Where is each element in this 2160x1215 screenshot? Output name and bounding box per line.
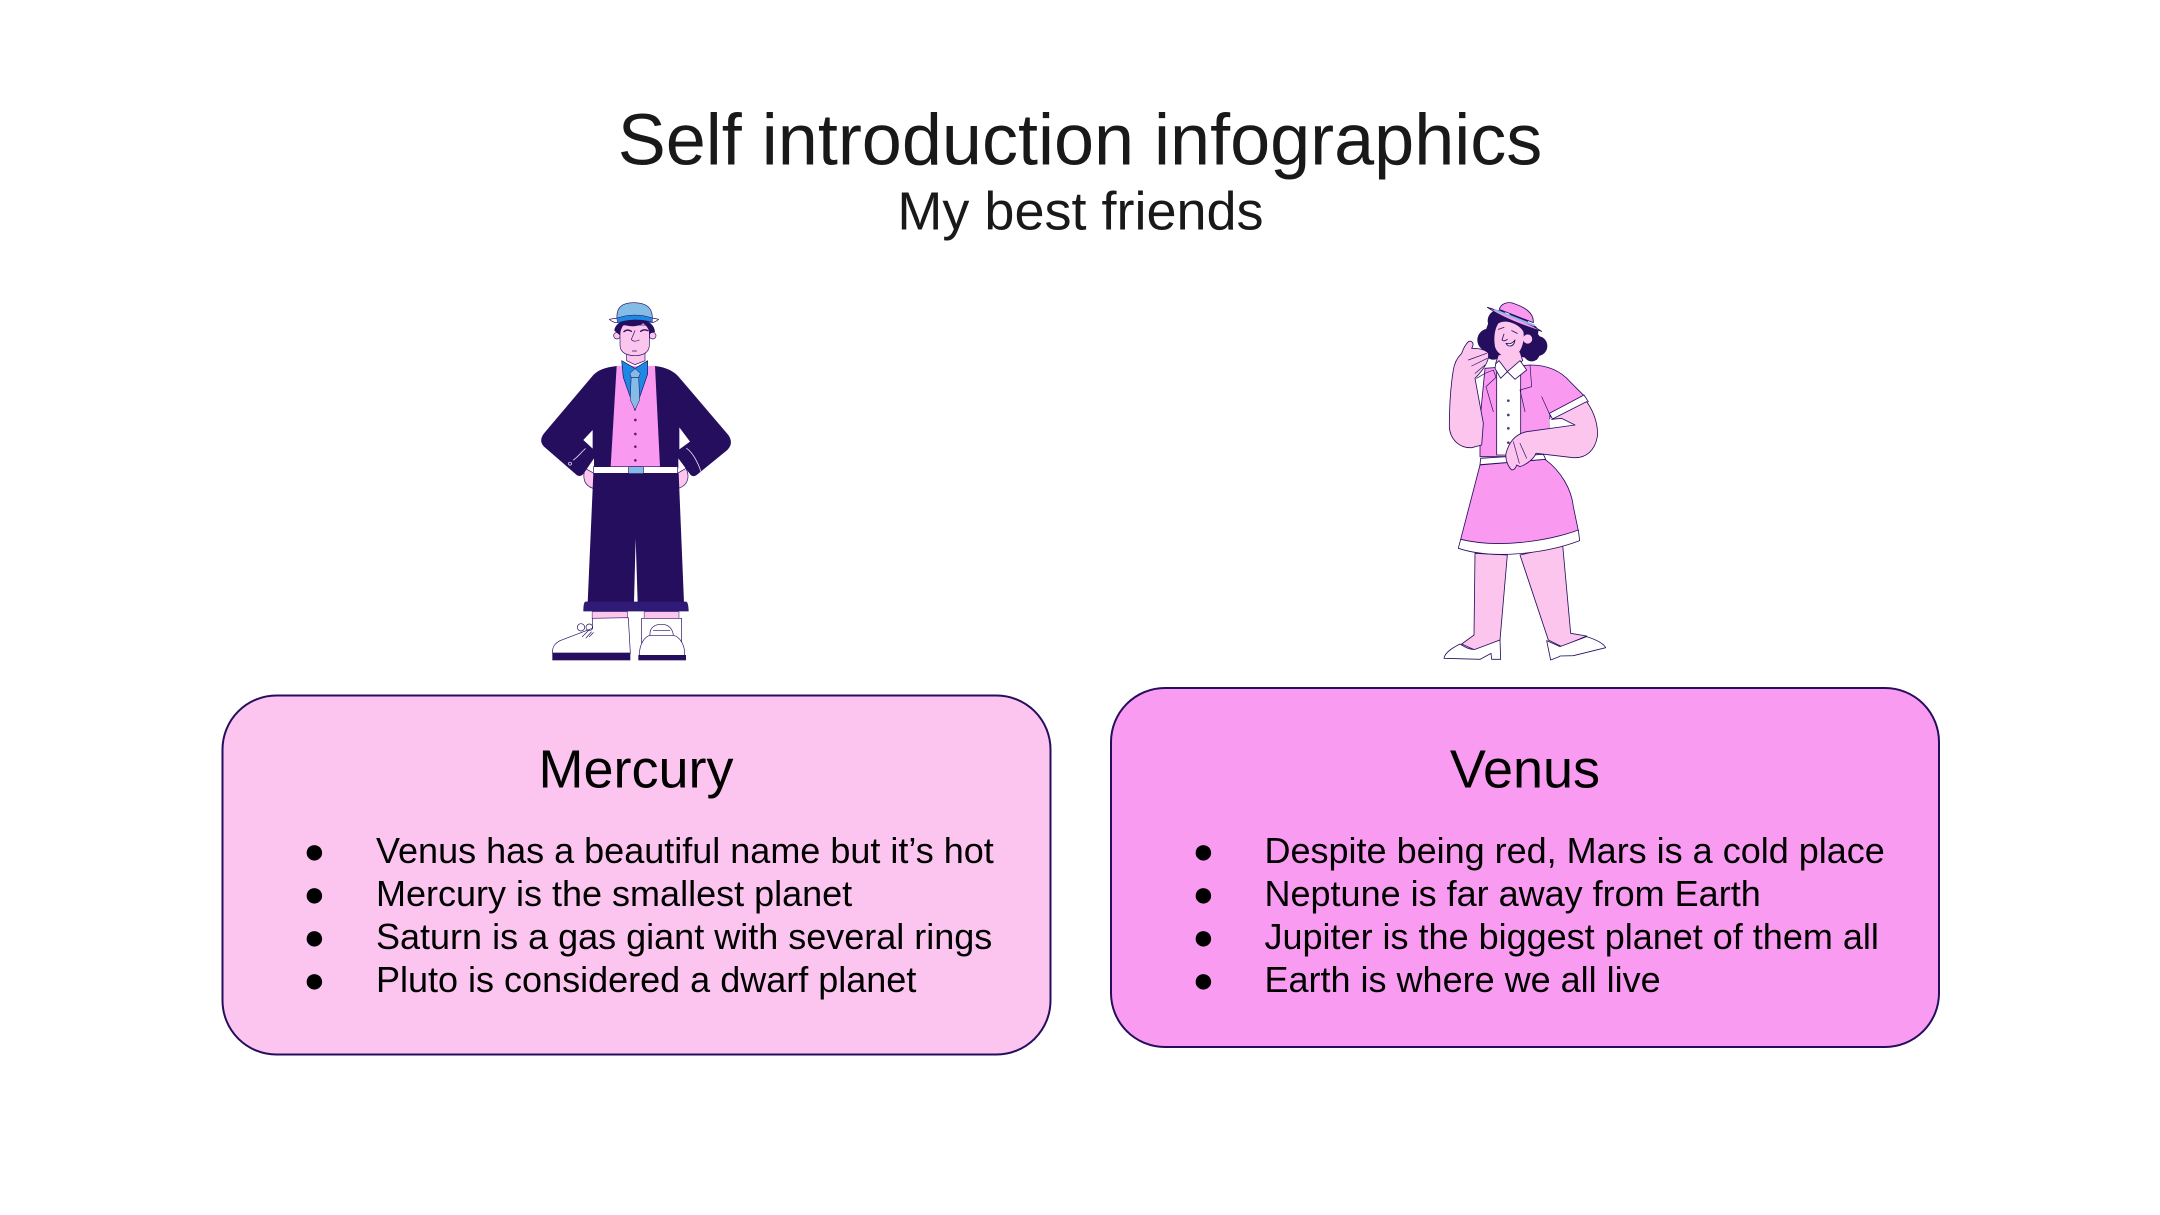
bullet list: Mercury: ●	[304, 916, 325, 957]
bullet list: Venus: Despite being red, Mars is a cold place	[1264, 830, 1885, 871]
panel background: Mercury	[222, 696, 1050, 1054]
bullet list: Venus: ●	[1192, 830, 1214, 871]
heading: Venus: Venus	[1450, 740, 1600, 800]
subtitle: My best friends	[897, 182, 1264, 242]
illustration: man in navy suit	[541, 303, 731, 660]
bullet list: Venus: Jupiter is the biggest planet of them all	[1264, 916, 1879, 957]
bullet list: Mercury: ●	[304, 959, 325, 1000]
bullet list: Mercury: Saturn is a gas giant with several rings	[376, 916, 992, 957]
bullet list: Venus: Neptune is far away from Earth	[1264, 873, 1761, 914]
bullet list: Mercury	[304, 830, 994, 1000]
hair	[1477, 310, 1547, 361]
bullet list: Venus: ●	[1192, 959, 1214, 1000]
title: Self introduction infographics	[618, 100, 1542, 180]
bullet list: Mercury: Pluto is considered a dwarf planet	[376, 959, 916, 1000]
bullet list: Venus: Earth is where we all live	[1264, 959, 1661, 1000]
panel: Mercury	[222, 696, 1050, 1054]
bullet list: Mercury: ●	[304, 830, 325, 871]
illustration: woman in pink dress	[1444, 303, 1606, 660]
bullet list: Venus: ●	[1192, 916, 1214, 957]
bullet list: Venus: ●	[1192, 873, 1214, 914]
bullet list: Mercury: ●	[304, 873, 325, 914]
bullet list: Venus	[1192, 830, 1885, 1000]
bullet list: Mercury: Mercury is the smallest planet	[376, 873, 852, 914]
panel background: Venus	[1111, 688, 1939, 1047]
panel: Venus	[1111, 688, 1939, 1047]
bullet list: Mercury: Venus has a beautiful name but it’s hot	[376, 830, 994, 871]
heading: Mercury: Mercury	[538, 740, 734, 800]
